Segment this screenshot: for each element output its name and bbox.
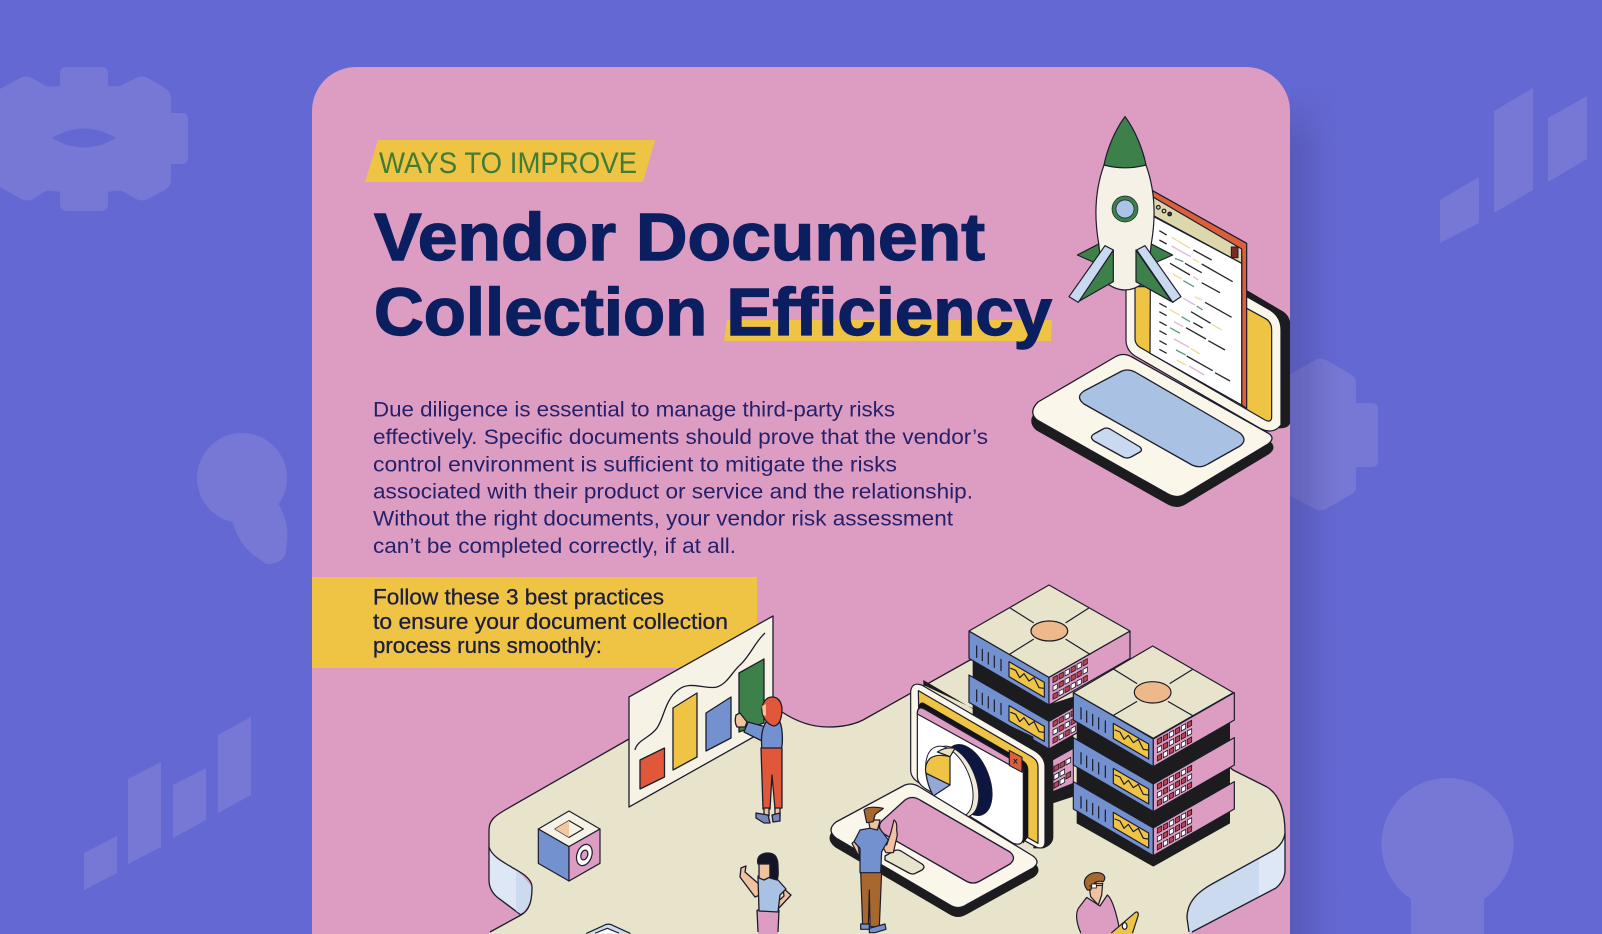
pink pad (880, 798, 1014, 883)
person: woman with black hair (740, 853, 791, 934)
panel: pink card (312, 67, 1290, 934)
body text (373, 398, 988, 558)
icon: cube (538, 811, 600, 881)
small pad (885, 850, 924, 874)
callout: best practices (312, 577, 757, 668)
title: Collection Efficiency (374, 275, 1052, 350)
icon: background bars right (1440, 88, 1587, 243)
card shadow (1290, 106, 1322, 934)
person: man with glasses and tablet (1077, 873, 1138, 934)
illustration: server racks (969, 585, 1234, 867)
body text: control environment is sufficient to mitigate the risks (373, 452, 897, 476)
body text: can’t be completed correctly, if at all. (373, 534, 736, 558)
screen: x (1013, 755, 1018, 765)
icon: background bars left (84, 717, 251, 890)
body text: Without the right documents, your vendor risk assessment (373, 506, 953, 530)
illustration: chart board (629, 616, 773, 807)
callout: best practices: Follow these 3 best practices (373, 584, 664, 610)
platform top surface (488, 660, 1285, 934)
bar: red (640, 748, 664, 789)
screen (911, 680, 1053, 848)
server rack back (969, 585, 1130, 803)
platform right edge (1188, 859, 1259, 933)
illustration: big laptop with pie chart (831, 680, 1053, 916)
bar: green (739, 659, 764, 732)
platform outline (489, 660, 1285, 932)
server rack front (1073, 646, 1234, 867)
person: woman at board (735, 697, 782, 823)
body text: associated with their product or service and the relationship. (373, 480, 973, 504)
illustration: laptop with rocket (1033, 191, 1291, 505)
icon: rocket (1069, 117, 1181, 302)
laptop trackpad (1080, 370, 1244, 467)
icon: background gear left (0, 67, 188, 211)
title: Vendor Document (374, 200, 985, 275)
laptop screen (1126, 191, 1291, 431)
bar: yellow (673, 693, 697, 770)
callout: best practices: to ensure your document collection (373, 609, 728, 634)
person: man at laptop (852, 807, 897, 933)
pie chart (916, 738, 1001, 824)
laptop base (1031, 415, 1274, 507)
icon: background light bulb right (1382, 778, 1514, 934)
base (831, 792, 1037, 916)
body text: Due diligence is essential to manage third-party risks (373, 398, 895, 422)
callout: best practices: process runs smoothly: (373, 633, 602, 658)
title (374, 200, 1052, 350)
icon: background light bulb left (197, 433, 287, 564)
body text: effectively. Specific documents should prove that the vendor’s (373, 425, 988, 449)
bar: blue (706, 697, 731, 751)
illustration: isometric platform (488, 660, 1285, 934)
icon: partial device at bottom (586, 924, 631, 933)
label: ways to improve: WAYS TO IMPROVE (379, 147, 637, 180)
icon: background gear right (1280, 358, 1378, 510)
platform left edge (488, 846, 524, 915)
